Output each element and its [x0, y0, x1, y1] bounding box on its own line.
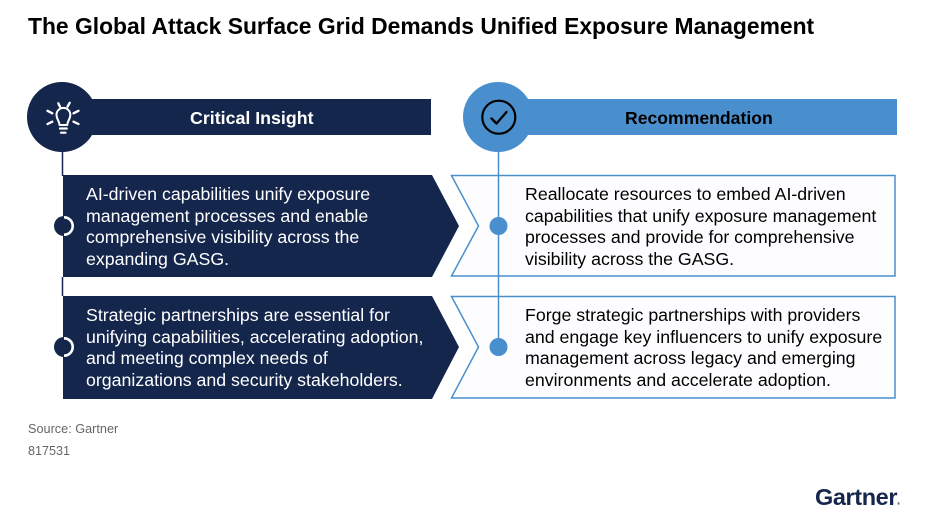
connector line: recommendation — [498, 150, 500, 347]
text: recommendation 2: and engage key influencers to unify exposure — [525, 326, 882, 346]
icon: lightbulb — [27, 82, 97, 152]
text: recommendation 1 — [525, 184, 876, 268]
text: recommendation 1: capabilities that unify exposure management — [525, 206, 876, 226]
logo: Gartner: Gartner® — [815, 484, 900, 510]
panel: critical insight shapes — [27, 82, 459, 399]
icon: check mark — [463, 82, 533, 152]
text: recommendation 2 — [525, 305, 882, 390]
text: insight 1: AI-driven capabilities unify exposure — [86, 184, 370, 204]
header bar: critical insight — [62, 99, 431, 135]
text: insight 2 — [86, 305, 423, 390]
text: insight 2: unifying capabilities, accelerating adoption, — [86, 326, 423, 346]
heading: critical insight: Critical Insight — [190, 108, 314, 128]
text: recommendation 2: Forge strategic partnerships with providers — [525, 305, 860, 325]
text: recommendation 2: environments and accelerate adoption. — [525, 370, 831, 390]
header bar: recommendation — [498, 99, 897, 135]
text: insight 1: management processes and enable — [86, 206, 368, 226]
text: insight 2: and meeting complex needs of — [86, 348, 328, 368]
text: recommendation 1: processes and provide for comprehensive — [525, 227, 855, 247]
text: insight 1: expanding GASG. — [86, 248, 229, 268]
text: recommendation 2: management across legacy and emerging — [525, 348, 856, 368]
panel: recommendation shapes — [452, 82, 897, 398]
recommendation box 1 — [452, 176, 895, 276]
insight box 2 — [63, 296, 459, 399]
text: insight 2: organizations and security stakeholders. — [86, 370, 403, 390]
text: insight 1 — [86, 184, 370, 268]
text: recommendation 1: visibility across the GASG. — [525, 248, 734, 268]
title: The Global Attack Surface Grid Demands Unified Exposure Management — [28, 13, 814, 39]
timeline dot 2 — [490, 338, 508, 356]
text: insight 1: comprehensive visibility across the — [86, 227, 359, 247]
insight box 1 — [63, 175, 459, 277]
timeline marker 1 — [54, 216, 74, 236]
timeline marker 2 — [54, 337, 74, 357]
text: recommendation 1: Reallocate resources to embed AI-driven — [525, 184, 846, 204]
source note: Source: Gartner — [28, 422, 118, 436]
connector line: insight — [62, 150, 64, 176]
connector line between insight boxes — [62, 277, 64, 296]
timeline dot 1 — [490, 217, 508, 235]
heading: recommendation: Recommendation — [625, 108, 773, 128]
document number: 817531 — [28, 444, 70, 458]
text: insight 2: Strategic partnerships are essential for — [86, 305, 390, 325]
recommendation box 2 — [452, 296, 895, 398]
